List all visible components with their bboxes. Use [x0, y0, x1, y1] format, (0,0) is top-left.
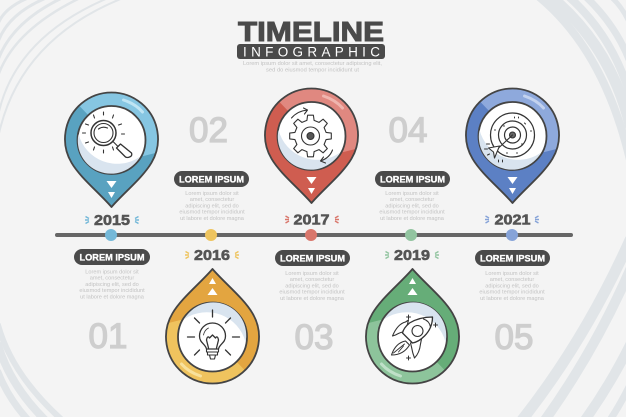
title: INFOGRAPHIC [243, 44, 380, 59]
icon: rocket [392, 315, 438, 360]
step 03 text block: amet, consectetur [290, 277, 334, 283]
pin 2016: light bulb [166, 269, 259, 384]
step 05 text block: amet, consectetur [490, 277, 534, 283]
number 03: 03 [295, 318, 333, 357]
step 05 text block: adipiscing elit, sed do [485, 283, 539, 289]
number 05: 05 [495, 318, 533, 357]
step 03 text block: Lorem ipsum dolor sit [285, 271, 339, 277]
step 01 text block [74, 249, 150, 300]
title [237, 16, 385, 59]
icon: target [484, 113, 534, 162]
year 2019: 2019 [394, 247, 430, 264]
step 01 text block: ut labore et dolore magna [80, 294, 145, 300]
timeline axis [55, 229, 573, 241]
step 02 text block: eiusmod tempor incididunt [179, 210, 245, 216]
step 01 text block: Lorem ipsum dolor sit [85, 270, 139, 276]
year 2017: 2017 [294, 212, 330, 228]
year 2016: 2016 [194, 247, 230, 264]
icon: bulb [188, 310, 240, 359]
step 05 text block [475, 250, 550, 302]
year 2016 [185, 247, 239, 264]
step 02 text block: LOREM IPSUM [179, 174, 244, 184]
step 03 text block: ut labore et dolore magna [280, 296, 345, 302]
step 04 text block: eiusmod tempor incididunt [379, 210, 445, 216]
subtitle text: sed do eiusmod tempor incididunt ut [266, 68, 359, 74]
step 05 text block: Lorem ipsum dolor sit [485, 271, 539, 277]
pin 2017: gear [265, 88, 358, 203]
step 02 text block: adipiscing elit, sed do [185, 203, 239, 209]
icon: magnifier [82, 112, 132, 158]
step 05 text block: LOREM IPSUM [480, 253, 545, 263]
pin 2021: target [466, 88, 559, 203]
step 05 text block: ut labore et dolore magna [480, 296, 545, 302]
step 04 text block: ut labore et dolore magna [380, 216, 445, 222]
subtitle text [243, 61, 382, 74]
year 2021 [485, 212, 539, 228]
step 02 text block: ut labore et dolore magna [180, 216, 245, 222]
step 04 text block: adipiscing elit, sed do [385, 203, 439, 209]
step 01 text block: adipiscing elit, sed do [85, 282, 139, 288]
pin 2019: rocket [366, 269, 459, 384]
step 01 text block: amet, consectetur [90, 276, 134, 282]
step 04 text block: amet, consectetur [390, 197, 434, 203]
step 03 text block: adipiscing elit, sed do [285, 283, 339, 289]
pin 2015: magnifier [65, 92, 158, 207]
step 04 text block [375, 171, 450, 222]
number 02: 02 [189, 111, 228, 150]
year 2019 [385, 247, 439, 264]
step 01 text block: eiusmod tempor incididunt [79, 288, 145, 294]
step 01 text block: LOREM IPSUM [80, 252, 144, 262]
step 04 text block: LOREM IPSUM [380, 174, 445, 184]
icon: gear [290, 108, 332, 163]
step 04 text block: Lorem ipsum dolor sit [385, 191, 439, 197]
step 02 text block: Lorem ipsum dolor sit [185, 191, 239, 197]
number 04: 04 [389, 111, 427, 150]
step 02 text block: amet, consectetur [190, 197, 234, 203]
step 05 text block: eiusmod tempor incididunt [479, 290, 545, 296]
step 03 text block [275, 250, 350, 302]
year 2021: 2021 [494, 212, 530, 228]
step 03 text block: LOREM IPSUM [280, 253, 345, 263]
year 2015: 2015 [94, 212, 130, 229]
step 03 text block: eiusmod tempor incididunt [279, 290, 345, 296]
year 2017 [285, 212, 339, 228]
number 01: 01 [89, 317, 127, 356]
title: TIMELINE [238, 16, 384, 47]
year 2015 [85, 212, 139, 229]
step 02 text block [174, 171, 249, 222]
subtitle text: Lorem ipsum dolor sit amet, consectetur adipiscing elit, [243, 61, 382, 67]
